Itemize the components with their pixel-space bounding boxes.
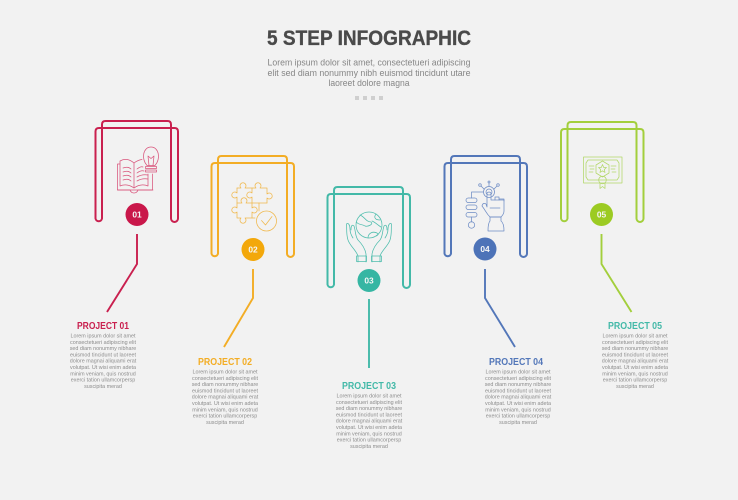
description 05: suscipita merad [616,384,654,390]
description 04: euismod tincidunt ut laoreet [485,388,551,394]
number badge 03 [358,269,380,292]
frame 02 [212,156,294,257]
icon: puzzle pieces and check [232,183,276,231]
description 02: minim veniam, quis nostrud [192,407,258,413]
icon: globe in hands [346,212,392,262]
subtitle text: elit sed diam nonummy nibh euismod tincidunt utare [268,68,470,79]
frame 03 [328,187,410,288]
subtitle text [268,58,470,89]
frame 01 [96,121,178,222]
number badge 01 [126,203,148,226]
description 02: consectetueri adipiscing elit [192,376,258,382]
subtitle text: laoreet dolore magna [328,78,410,89]
description 03: dolore magnai aliquami erat [336,419,403,425]
description 04: sed diam nonummy nibhare [485,382,551,388]
step 05 [561,122,669,390]
step 05: 05 [597,210,606,220]
connector 02 [224,269,253,347]
step 01: 01 [132,210,142,220]
step 03: 03 [364,276,374,286]
description 04: suscipita merad [499,420,537,426]
frame 05 [561,122,644,222]
description 05: sed diam nonummy nibhare [602,346,668,352]
description 03: suscipita merad [350,444,388,450]
label 03: PROJECT 03 [342,381,396,392]
description 05: exerci tation ullamcorpersp [603,378,667,384]
description 05: dolore magnai aliquami erat [602,359,669,365]
description 01: minim veniam, quis nostrud [70,371,136,377]
step 02: 02 [248,244,258,254]
icon: certificate [584,157,622,188]
label 02: PROJECT 02 [198,357,252,368]
description 01: exerci tation ullamcorpersp [71,378,135,384]
description 05 [602,334,669,390]
number badge 05 [590,203,613,226]
label 01: PROJECT 01 [77,321,129,332]
description 01: suscipita merad [84,384,122,390]
description 02: suscipita merad [206,420,244,426]
step 03 [328,187,410,450]
step 04: 04 [480,244,490,254]
subtitle text: Lorem ipsum dolor sit amet, consectetueri adipiscing [268,58,470,68]
description 03: Lorem ipsum dolor sit amet [336,394,402,400]
description 03: volutpat. Ut wisi enim adeta [336,425,402,431]
icon: book and light bulb [118,147,158,193]
description 02: euismod tincidunt ut laoreet [192,388,258,394]
label 04: PROJECT 04 [489,357,543,368]
description 04: consectetueri adipiscing elit [485,376,551,382]
description 05: Lorem ipsum dolor sit amet [602,334,668,340]
description 05: consectetueri adipiscing elit [602,340,668,346]
connector 03 [368,299,370,368]
step 01 [70,121,178,390]
description 04: exerci tation ullamcorpersp [486,414,550,420]
connector 05 [602,234,632,312]
description 04 [485,370,552,426]
number badge 04 [474,238,496,260]
description 05: minim veniam, quis nostrud [602,371,668,377]
frame 04 [444,156,527,257]
step 02 [192,156,294,426]
description 02: dolore magnai aliquami erat [192,395,259,401]
description 01: sed diam nonummy nibhare [70,346,136,352]
description 01: dolore magnai aliquami erat [70,359,137,365]
description 03: exerci tation ullamcorpersp [337,438,401,444]
description 03 [336,394,403,450]
description 02: volutpat. Ut wisi enim adeta [192,401,258,407]
description 04: minim veniam, quis nostrud [485,407,551,413]
connector 04 [485,269,515,347]
description 01: euismod tincidunt ut laoreet [70,352,136,358]
connector 01 [107,234,137,312]
description 01: Lorem ipsum dolor sit amet [70,334,136,340]
number badge 02 [242,238,264,261]
description 03: consectetueri adipiscing elit [336,400,402,406]
description 05: euismod tincidunt ut laoreet [602,352,668,358]
description 03: minim veniam, quis nostrud [336,431,402,437]
description 01: consectetueri adipiscing elit [70,340,136,346]
label 05: PROJECT 05 [608,321,662,332]
description 04: dolore magnai aliquami erat [485,395,552,401]
description 02: Lorem ipsum dolor sit amet [192,370,258,376]
description 02: sed diam nonummy nibhare [192,382,258,388]
description 03: sed diam nonummy nibhare [336,406,402,412]
pagination dots [355,96,383,100]
description 04: Lorem ipsum dolor sit amet [485,370,551,376]
description 01 [70,334,137,390]
step 04 [444,156,552,426]
description 02 [192,370,259,426]
title: 5 STEP INFOGRAPHIC [267,26,471,50]
description 04: volutpat. Ut wisi enim adeta [485,401,551,407]
icon: robot hand and flowchart [466,181,504,231]
description 05: volutpat. Ut wisi enim adeta [602,365,668,371]
description 01: volutpat. Ut wisi enim adeta [70,365,136,371]
description 02: exerci tation ullamcorpersp [193,414,257,420]
description 03: euismod tincidunt ut laoreet [336,412,402,418]
